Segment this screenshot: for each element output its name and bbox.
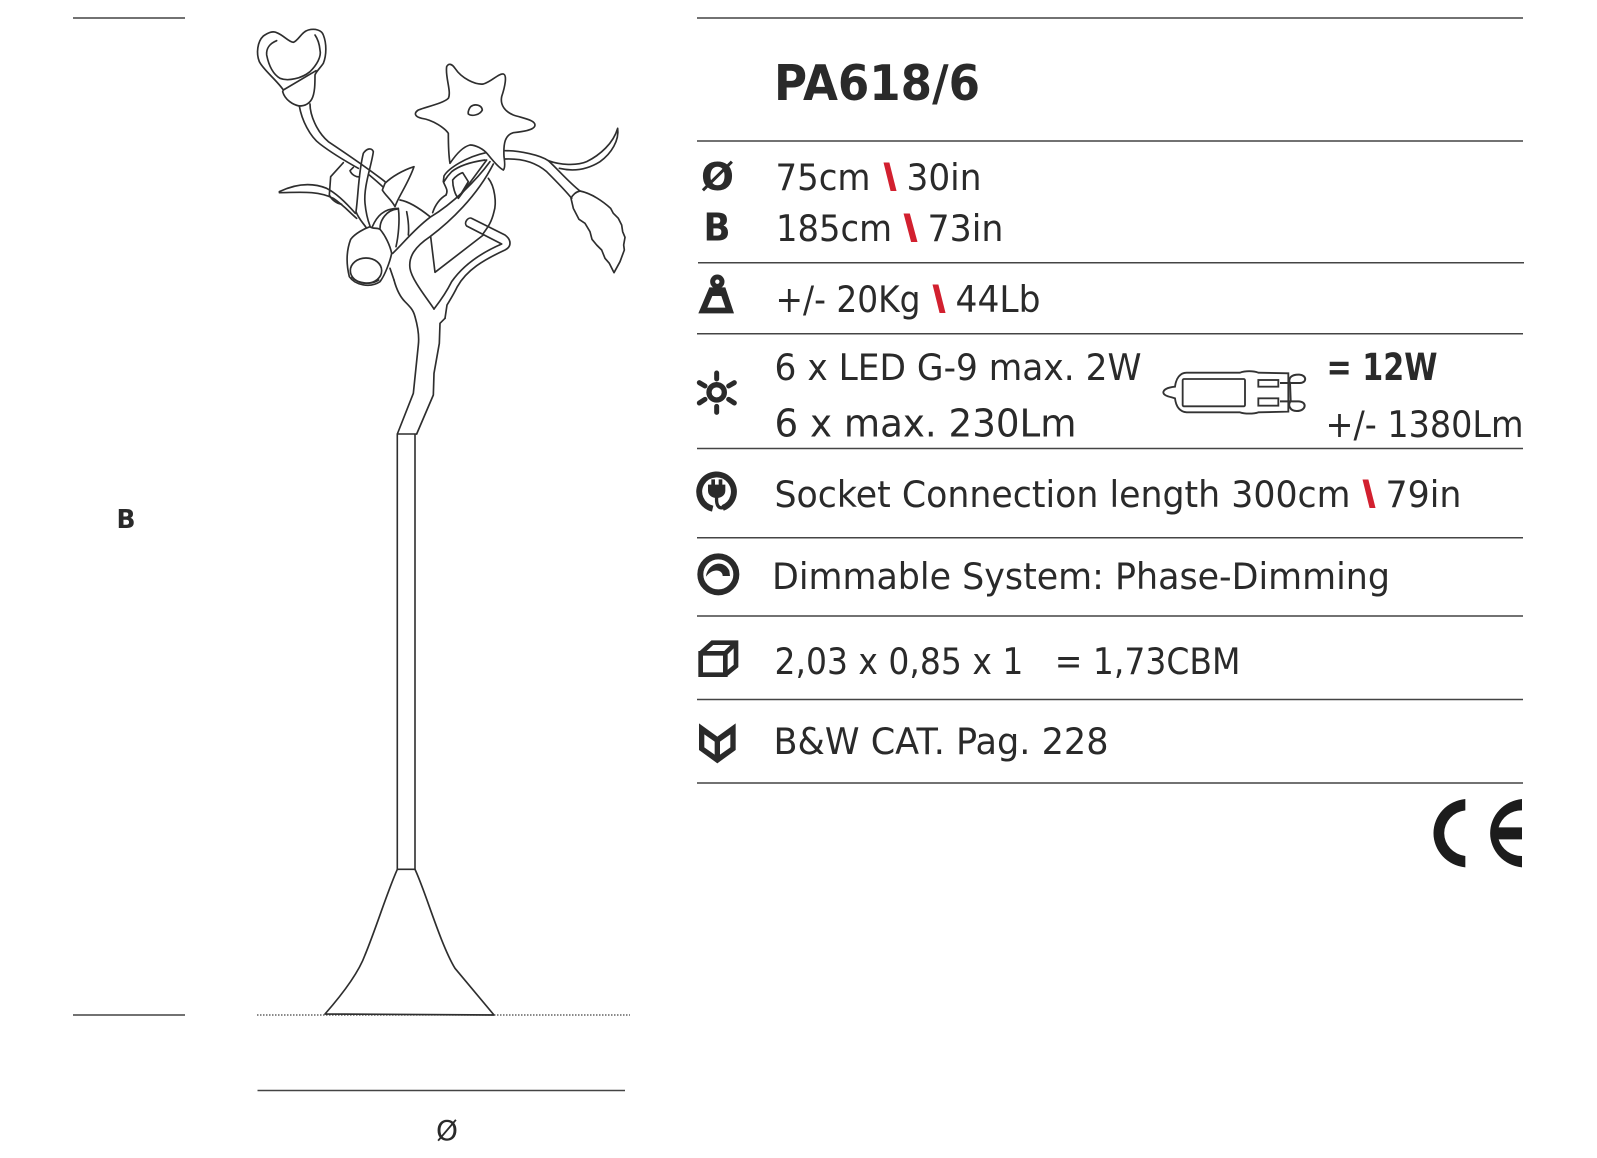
panel: lamp technical drawing with dimensions	[73, 18, 630, 1147]
narrow loop leaf	[356, 149, 373, 227]
row: weight value: 44Lb	[956, 278, 1040, 321]
right curved leaf	[548, 128, 618, 170]
row: height value: 185cm	[776, 207, 892, 250]
icon: G9 bulb	[1163, 371, 1305, 414]
dimension marker: bottom height line	[73, 1014, 185, 1016]
row: LED source: 6 x LED G-9 max. 2W	[774, 346, 1142, 389]
row: socket connection: \	[1362, 474, 1377, 516]
icon: packaging box	[701, 643, 736, 675]
row: weight value	[776, 278, 1040, 321]
icon: weight	[698, 277, 734, 313]
row: socket connection: 79in	[1386, 473, 1462, 516]
height label B: B	[116, 505, 136, 535]
hidden left leaf	[329, 163, 359, 204]
row: diameter value: \	[883, 157, 898, 199]
dimension marker: top height line	[73, 17, 185, 19]
icon: socket plug	[699, 474, 734, 509]
twisted band under star	[443, 153, 487, 198]
trunk	[394, 280, 445, 434]
heart flower	[258, 29, 326, 106]
diameter dimension line	[258, 1090, 625, 1092]
row: total lumens: +/- 1380Lm	[1326, 403, 1524, 446]
row: height value: \	[903, 208, 919, 250]
row: total power: = 12W	[1326, 346, 1438, 389]
icon: diameter: Ø	[701, 155, 734, 199]
small upper leaf	[382, 167, 414, 207]
row: diameter value: 75cm	[776, 156, 870, 199]
icon: catalogue book	[699, 723, 736, 763]
lamp line drawing	[258, 29, 625, 1015]
bud opening	[350, 258, 382, 283]
upper flowers and stems	[258, 29, 535, 218]
icon: dimmer	[700, 556, 736, 592]
right stem	[505, 151, 580, 198]
row: catalogue page: B&W CAT. Pag. 228	[774, 720, 1108, 763]
central branches and bud	[329, 149, 510, 318]
arches behind bud	[372, 200, 430, 247]
title: product code: PA618/6	[774, 55, 980, 112]
side bulges	[433, 178, 495, 233]
lower left bud with opening	[347, 227, 392, 285]
icon: height: B	[704, 206, 730, 250]
pole	[397, 434, 417, 869]
panel: product specifications	[697, 18, 1524, 867]
table dividers	[697, 18, 1524, 783]
row: packaging volume: 2,03 x 0,85 x 1 = 1,73CBM	[774, 640, 1240, 683]
row: height value	[776, 207, 1004, 250]
row: weight value: \	[932, 279, 947, 321]
row: height value: 73in	[928, 207, 1004, 250]
row: lumens per source: 6 x max. 230Lm	[774, 402, 1076, 446]
angular hook branch	[431, 218, 510, 318]
left stem	[299, 104, 385, 187]
star flower	[415, 64, 535, 170]
right serrated bud	[571, 191, 625, 273]
row: diameter value	[776, 156, 982, 199]
row: dimmable system: Dimmable System: Phase-Dimming	[772, 555, 1390, 598]
diameter label: Ø	[436, 1114, 458, 1147]
icon: CE mark	[1433, 799, 1522, 867]
conical base	[325, 869, 494, 1015]
row: weight value: +/- 20Kg	[776, 278, 920, 321]
main branch	[390, 162, 493, 309]
right stem, blade leaf and serrated bud	[505, 128, 625, 273]
floor dotted line	[257, 1014, 630, 1016]
left pointed leaf	[279, 185, 357, 218]
row: diameter value: 30in	[906, 156, 982, 199]
icon: light sun	[699, 373, 734, 412]
row: socket connection: Socket Connection length 300cm	[774, 473, 1350, 516]
